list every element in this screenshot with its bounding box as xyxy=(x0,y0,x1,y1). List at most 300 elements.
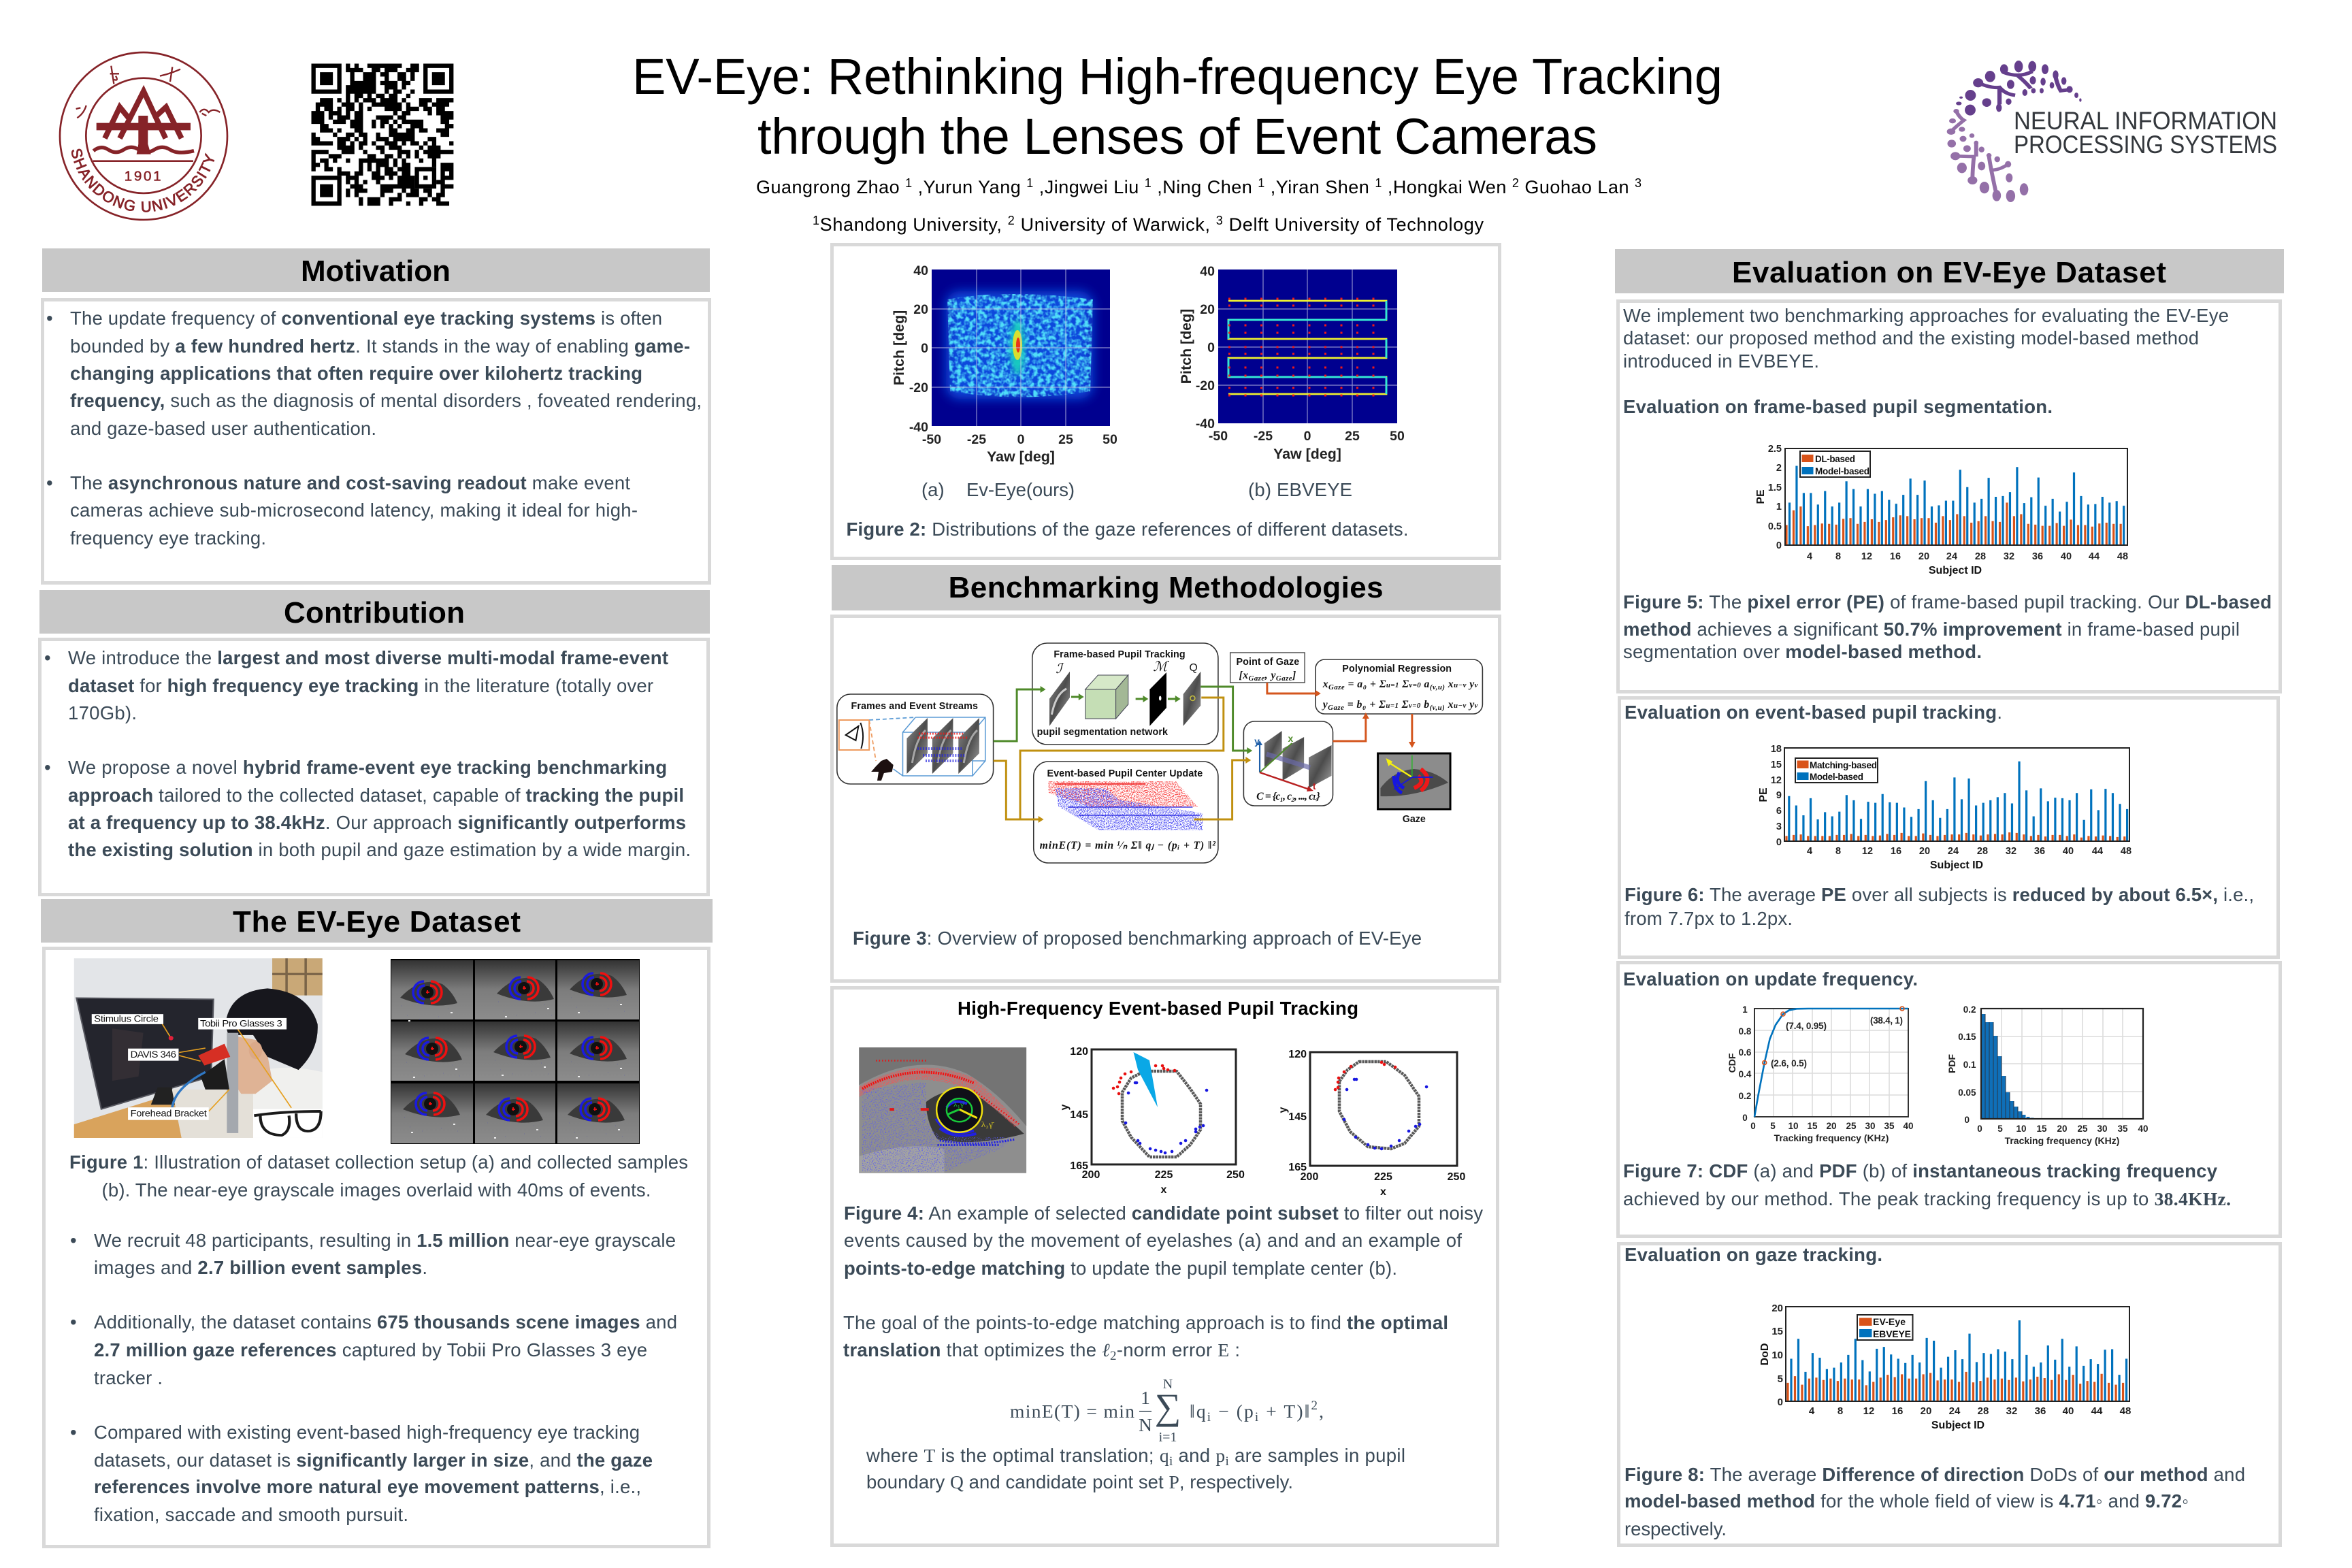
text: matching goal: 2 xyxy=(1110,1349,1116,1363)
bullet 2: frequency eye tracking. xyxy=(70,527,266,549)
chart: Figure 7 PDF: 20 xyxy=(2057,1124,2068,1134)
chart: points-to-edge matching after xyxy=(1277,1049,1465,1198)
chart: points-to-edge matching after: 120 xyxy=(1288,1049,1307,1060)
chart: Figure 6 pixel error: 28 xyxy=(1977,846,1988,857)
bullet 2: • xyxy=(44,757,51,778)
subheading: gaze tracking: Evaluation on gaze tracking. xyxy=(1624,1244,1882,1265)
authors: ,Yurun Yang xyxy=(913,177,1026,197)
bullet 2 xyxy=(46,472,638,549)
text: equation legend xyxy=(866,1445,1405,1492)
chart: Figure 7 PDF: 15 xyxy=(2036,1124,2047,1134)
title xyxy=(632,48,1722,165)
chart: Figure 5 pixel error: 24 xyxy=(1946,551,1957,562)
caption: Figure 5 xyxy=(1623,591,2272,662)
chart: EV-Eye gaze heatmap: 0 xyxy=(1017,432,1025,447)
chart: points-to-edge matching after: x xyxy=(1380,1186,1386,1198)
box: Point of Gaze: Point of Gaze xyxy=(1237,657,1299,668)
caption: Figure 8: model-based method for the whole field of view is 4.71◦ and 9.72◦ xyxy=(1624,1490,2189,1512)
caption: Figure 4: points-to-edge matching to update the pupil template center (b). xyxy=(844,1258,1397,1279)
subheading: event-based pupil tracking: Evaluation on event-based pupil tracking. xyxy=(1624,702,2002,723)
box: Polynomial Regression: x xyxy=(1323,679,1328,690)
chart: Figure 5 pixel error: 2.5 xyxy=(1768,444,1782,455)
affiliations: Shandong University, xyxy=(820,214,1007,235)
label: Tobii Pro Glasses 3: Tobii Pro Glasses 3 xyxy=(200,1018,282,1029)
label: DAVIS 346: DAVIS 346 xyxy=(131,1049,176,1060)
chart: Figure 7 CDF: 20 xyxy=(1826,1121,1837,1131)
bullet: comparison: fixation, saccade and smooth pursuit. xyxy=(94,1504,408,1525)
bullet 2: cameras achieve sub-microsecond latency, making it ideal for high- xyxy=(70,500,638,521)
bullet 1: The update frequency of conventional eye tracking systems is often xyxy=(70,308,662,329)
diagram: EV-Eye pipeline xyxy=(837,643,1482,863)
box: Polynomial Regression: u=1 Σv=0 b xyxy=(1386,699,1429,710)
authors: Guohao Lan xyxy=(1519,177,1634,197)
chart: Figure 7 PDF: 0 xyxy=(1964,1115,1970,1125)
box: Polynomial Regression: Gaze xyxy=(1328,704,1344,712)
chart: EV-Eye gaze heatmap xyxy=(891,263,1117,465)
panel: The EV-Eye Dataset xyxy=(44,949,709,1546)
equation: minE(T): N xyxy=(1139,1414,1152,1435)
box: Polynomial Regression: x xyxy=(1445,679,1454,690)
authors: 1 xyxy=(1026,176,1033,190)
authors: 1 xyxy=(1375,176,1382,190)
subcaption a: (a) xyxy=(921,479,945,500)
bullet 2: the existing solution in both pupil and gaze estimation by a wide margin. xyxy=(68,839,691,860)
arrows: orange flow xyxy=(1267,683,1416,748)
bullet: comparison xyxy=(70,1422,653,1525)
box: Event-based Pupil Center Update: Event-based Pupil Center Update xyxy=(1047,768,1203,779)
caption: Figure 6: from 7.7px to 1.2px. xyxy=(1624,908,1793,929)
title: EV-Eye: Rethinking High-frequency Eye Tracking xyxy=(632,48,1722,105)
equation: minE(T): i=1 xyxy=(1159,1430,1177,1445)
bullet 1: dataset for high frequency eye tracking in the literature (totally over xyxy=(68,675,653,696)
heading: Contribution: Contribution xyxy=(284,596,465,630)
chart: Figure 8 difference of direction: 24 xyxy=(1949,1405,1961,1417)
bullet: comparison: references involve more natural eye movement patterns, i.e., xyxy=(94,1476,641,1497)
affiliations: 3 xyxy=(1216,214,1223,227)
logo: Shandong University seal: 1901 xyxy=(125,169,163,184)
chart: Figure 8 difference of direction: 20 xyxy=(1771,1303,1783,1314)
authors: 2 xyxy=(1512,176,1519,190)
caption: Figure 8 xyxy=(1624,1464,2245,1539)
caption: Figure 3: Figure 3: Overview of proposed benchmarking approach of EV-Eye xyxy=(853,928,1422,949)
box: Frame-based Pupil Tracking: pupil segmentation network xyxy=(1037,727,1169,738)
bullet: scene images: Additionally, the dataset contains 675 thousands scene images and xyxy=(94,1311,677,1333)
chart: EBVEYE gaze pattern: 0 xyxy=(1304,429,1311,444)
box: Polynomial Regression: = a₀ + Σ xyxy=(1345,679,1386,690)
chart: Figure 6 pixel error: Model-based xyxy=(1810,772,1863,782)
chart: Figure 8 difference of direction: 32 xyxy=(2006,1405,2017,1417)
chart: Figure 8 difference of direction: DoD xyxy=(1759,1343,1771,1365)
chart: Figure 6 pixel error: PE xyxy=(1758,787,1769,802)
heading: Evaluation on EV-Eye Dataset: Evaluation on EV-Eye Dataset xyxy=(1732,256,2166,289)
equation: minE(T): ∑ xyxy=(1155,1386,1181,1427)
text: equation legend: are samples in pupil xyxy=(1229,1445,1405,1466)
bullet 1: frequency, such as the diagnosis of mental disorders , foveated rendering, xyxy=(70,390,702,411)
chart: EBVEYE gaze pattern: 25 xyxy=(1345,429,1360,444)
bullet: comparison: • xyxy=(70,1422,77,1443)
box: Polynomial Regression: (v,u) xyxy=(1430,704,1445,712)
box: candidate set C: t xyxy=(1313,781,1316,791)
chart: Figure 8 difference of direction: 4 xyxy=(1809,1405,1815,1417)
chart: Figure 6 pixel error: 44 xyxy=(2092,846,2103,857)
chart: points-to-edge matching before: 200 xyxy=(1082,1169,1100,1181)
chart: EV-Eye gaze heatmap: 25 xyxy=(1058,432,1073,447)
chart: points-to-edge matching before: x xyxy=(1161,1184,1167,1196)
authors: ,Ning Chen xyxy=(1152,177,1258,197)
image: eye with candidate points: λ₁γ̄ xyxy=(953,1101,965,1109)
bullet: scene images xyxy=(70,1311,677,1388)
chart: Figure 7 CDF: 5 xyxy=(1770,1121,1776,1131)
caption: Figure 5: method achieves a significant 50.7% improvement in frame-based pupil xyxy=(1623,619,2240,640)
caption: Figure 4 xyxy=(844,1203,1483,1279)
chart: points-to-edge matching before xyxy=(1059,1046,1245,1196)
chart: Figure 6 pixel error: 9 xyxy=(1776,790,1782,801)
chart: EV-Eye gaze heatmap: 0 xyxy=(921,341,928,356)
heading: Motivation xyxy=(42,248,710,292)
chart: Figure 7 PDF: 0.1 xyxy=(1963,1060,1976,1070)
box: candidate set C: C = {c₁, c₂, ..., cL} xyxy=(1256,791,1320,802)
box: Polynomial Regression: u−v yv xyxy=(1454,679,1477,690)
logo: Neural Information Processing Systems xyxy=(1947,61,2277,202)
chart: Figure 7 PDF xyxy=(1946,1004,2149,1146)
chart: Figure 7 CDF: (7.4, 0.95) xyxy=(1786,1021,1827,1031)
chart: Figure 8 difference of direction xyxy=(1759,1303,2131,1431)
chart: Figure 8 difference of direction: 36 xyxy=(2035,1405,2046,1417)
equation: minE(T): , xyxy=(1319,1401,1324,1422)
box: Frames and Event Streams xyxy=(837,694,994,784)
chart: Figure 6 pixel error: 40 xyxy=(2063,846,2074,857)
chart: EBVEYE gaze pattern: -40 xyxy=(1196,416,1215,431)
panel: Benchmarking Methodologies xyxy=(832,617,1500,981)
title: through the Lenses of Event Cameras xyxy=(757,108,1597,165)
chart: Figure 8 difference of direction: 44 xyxy=(2091,1405,2103,1417)
equation: minE(T): ‖q xyxy=(1190,1401,1206,1422)
subheading: frame-based pupil segmentation: Evaluation on frame-based pupil segmentation. xyxy=(1623,396,2053,417)
box: Polynomial Regression: Polynomial Regression xyxy=(1342,664,1452,674)
chart: Figure 7 CDF: 1 xyxy=(1742,1004,1748,1015)
chart: Figure 6 pixel error: 48 xyxy=(2121,846,2132,857)
bullet 2: at a frequency up to 38.4kHz. Our approach significantly outperforms xyxy=(68,812,686,833)
chart: Figure 5 pixel error: 28 xyxy=(1975,551,1986,562)
chart: Figure 6 pixel error: 6 xyxy=(1776,806,1782,817)
chart: Figure 7 CDF: 0.2 xyxy=(1739,1091,1751,1101)
chart: Figure 5 pixel error: 4 xyxy=(1807,551,1812,562)
box: Polynomial Regression: x xyxy=(1445,699,1454,710)
chart: Figure 7 PDF: PDF xyxy=(1946,1054,1957,1073)
box: Polynomial Regression: = b₀ + Σ xyxy=(1344,699,1386,710)
logo: Neural Information Processing Systems: PROCESSING SYSTEMS xyxy=(2014,131,2277,159)
chart: Figure 7 CDF: 30 xyxy=(1865,1121,1876,1131)
text: matching goal: -norm error xyxy=(1117,1339,1218,1360)
chart: Figure 6 pixel error: 20 xyxy=(1919,846,1930,857)
text: matching goal xyxy=(843,1312,1448,1363)
subheading: update frequency: Evaluation on update frequency. xyxy=(1623,968,1918,990)
image: gaze result xyxy=(1378,753,1450,809)
panel: gaze tracking evaluation xyxy=(1618,1244,2280,1545)
bullet: scene images: • xyxy=(70,1311,77,1333)
heading: Evaluation on EV-Eye Dataset xyxy=(1615,249,2284,293)
chart: Figure 7 CDF: CDF xyxy=(1727,1053,1737,1073)
text: equation legend: boundary Q and candidate point set P, respectively. xyxy=(866,1471,1293,1492)
chart: Figure 6 pixel error: 36 xyxy=(2034,846,2045,857)
text: equation legend: and xyxy=(1173,1445,1215,1466)
chart: Figure 7 PDF: 35 xyxy=(2117,1124,2128,1134)
bullet 2 xyxy=(44,757,691,860)
bullet 2: The asynchronous nature and cost-saving readout make event xyxy=(70,472,630,493)
chart: EBVEYE gaze pattern: 40 xyxy=(1200,264,1215,279)
chart: points-to-edge matching after: 225 xyxy=(1374,1171,1392,1183)
logo: Shandong University seal: SHANDONG UNIVERSITY xyxy=(71,148,215,212)
affiliations: 1 xyxy=(813,214,819,227)
caption: Figure 5: segmentation over model-based method. xyxy=(1623,641,1982,662)
chart: Figure 7 PDF: 40 xyxy=(2138,1124,2149,1134)
chart: Figure 7 PDF: 25 xyxy=(2077,1124,2088,1134)
bullet 1: changing applications that often require over kilohertz tracking xyxy=(70,363,642,384)
bullet 1: • xyxy=(46,308,53,329)
bullet: scene images: tracker . xyxy=(94,1367,163,1388)
box: Frame-based Pupil Tracking: Frame-based Pupil Tracking xyxy=(1054,649,1186,660)
box: Polynomial Regression: u=1 Σv=0 a xyxy=(1386,679,1429,690)
heading: The EV-Eye Dataset xyxy=(41,899,713,943)
QR code xyxy=(312,64,453,206)
box: Frame-based Pupil Tracking: ℐ xyxy=(1056,662,1064,676)
bullet 2: We propose a novel hybrid frame-event eye tracking benchmarking xyxy=(68,757,667,778)
bullet 1 xyxy=(44,647,668,723)
caption: Figure 4: events caused by the movement of eyelashes (a) and and an example of xyxy=(844,1230,1462,1251)
equation: minE(T): 2 xyxy=(1311,1399,1318,1413)
chart: Figure 5 pixel error: 16 xyxy=(1890,551,1901,562)
chart: EBVEYE gaze pattern: -25 xyxy=(1254,429,1273,444)
chart: Figure 7 CDF: 0 xyxy=(1742,1113,1748,1123)
box: Polynomial Regression xyxy=(1316,659,1482,714)
chart: Figure 7 CDF: 15 xyxy=(1807,1121,1818,1131)
bullet: scene images: 2.7 million gaze references captured by Tobii Pro Glasses 3 eye xyxy=(94,1339,647,1360)
chart: Figure 6 pixel error: 8 xyxy=(1835,846,1841,857)
chart: EBVEYE gaze pattern: 0 xyxy=(1207,340,1215,355)
text: introduction: introduced in EVBEYE. xyxy=(1623,350,1819,372)
chart: points-to-edge matching before: 225 xyxy=(1155,1169,1173,1181)
equation: minE(T): N xyxy=(1163,1377,1173,1392)
chart: EV-Eye gaze heatmap: -25 xyxy=(967,432,986,447)
chart: Figure 7 CDF: 0 xyxy=(1750,1121,1756,1131)
text: equation legend: where T is the optimal translation; q xyxy=(866,1445,1169,1466)
box: Polynomial Regression: y xyxy=(1323,699,1328,710)
equation: minE(T): i xyxy=(1207,1410,1211,1424)
chart: EV-Eye gaze heatmap: Yaw [deg] xyxy=(987,448,1055,465)
text: introduction: dataset: our proposed method and the existing model-based method xyxy=(1623,327,2199,348)
box: Frame-based Pupil Tracking xyxy=(1032,643,1218,745)
chart: Figure 6 pixel error: 12 xyxy=(1771,775,1782,786)
panel: frame-based evaluation xyxy=(1618,301,2280,691)
arrows: gold flow xyxy=(994,698,1251,823)
chart: Figure 5 pixel error: PE xyxy=(1755,489,1767,504)
caption: Figure 8: respectively. xyxy=(1624,1518,1727,1539)
chart: EV-Eye gaze heatmap: 40 xyxy=(913,263,928,278)
chart: Figure 8 difference of direction: 0 xyxy=(1778,1396,1783,1408)
panel: High-Frequency Event-based Pupil Tracking xyxy=(832,988,1497,1545)
bullet: participants: We recruit 48 participants, resulting in 1.5 million near-eye grayscale xyxy=(94,1230,676,1251)
label: Stimulus Circle: Stimulus Circle xyxy=(94,1013,159,1024)
chart: Figure 5 pixel error: 12 xyxy=(1861,551,1872,562)
chart: EV-Eye gaze heatmap: Pitch [deg] xyxy=(891,310,907,385)
text: equation legend: i xyxy=(1225,1454,1229,1469)
chart: points-to-edge matching before: 120 xyxy=(1070,1046,1088,1058)
chart: Figure 6 pixel error: Matching-based xyxy=(1810,760,1877,770)
chart: Figure 7 PDF: 0.2 xyxy=(1963,1004,1976,1015)
chart: Figure 5 pixel error: 40 xyxy=(2061,551,2072,562)
panel: Contribution xyxy=(39,640,708,894)
chart: Figure 5 pixel error: 36 xyxy=(2032,551,2043,562)
chart: Figure 7 PDF: 5 xyxy=(1997,1124,2003,1134)
heading: Benchmarking Methodologies xyxy=(832,565,1501,610)
bullet 1: and gaze-based user authentication. xyxy=(70,418,376,439)
chart: Figure 6 pixel error: Subject ID xyxy=(1930,860,1983,871)
chart: Figure 5 pixel error: 1.5 xyxy=(1768,483,1782,493)
image: eye with candidate points: λ₂γ̄ xyxy=(981,1120,994,1129)
bullet: comparison: Compared with existing event-based high-frequency eye tracking xyxy=(94,1422,640,1443)
chart: EBVEYE gaze pattern: 20 xyxy=(1200,302,1215,317)
logo: Neural Information Processing Systems: NEURAL INFORMATION xyxy=(2014,107,2277,135)
chart: Figure 5 pixel error: Subject ID xyxy=(1929,565,1982,576)
authors: 1 xyxy=(1145,176,1152,190)
chart: Figure 7 CDF: 0.6 xyxy=(1739,1047,1752,1058)
chart: Figure 8 difference of direction: 15 xyxy=(1771,1326,1783,1337)
authors: Guangrong Zhao xyxy=(756,177,900,197)
panel: event-based evaluation xyxy=(1620,698,2278,957)
chart: Figure 7 CDF: 0.8 xyxy=(1739,1026,1752,1036)
equation: minE(T): minE(T) = min xyxy=(1010,1401,1134,1422)
bullet 1: • xyxy=(44,647,51,668)
bullet 2: • xyxy=(46,472,53,493)
photo: collection setup xyxy=(74,958,323,1138)
text: matching goal: E : xyxy=(1218,1339,1240,1360)
equation: minE(T): i xyxy=(1255,1410,1258,1424)
box: Point of Gaze: ] xyxy=(1292,670,1296,681)
text: matching goal: The goal of the points-to-edge matching approach is to find the optimal xyxy=(843,1312,1448,1333)
chart: Figure 5 pixel error: 1 xyxy=(1776,502,1782,512)
heading: The EV-Eye Dataset: The EV-Eye Dataset xyxy=(233,905,521,938)
authors: ,Jingwei Liu xyxy=(1034,177,1144,197)
box: Frame-based Pupil Tracking: Q xyxy=(1190,662,1198,674)
box: Polynomial Regression: (v,u) xyxy=(1430,683,1445,691)
heading: High-Frequency Event-based Pupil Tracking: High-Frequency Event-based Pupil Tracking xyxy=(958,998,1358,1019)
chart: Figure 5 pixel error: 0.5 xyxy=(1768,521,1782,532)
chart: EBVEYE gaze pattern: -50 xyxy=(1209,429,1228,444)
chart: Figure 8 difference of direction: 20 xyxy=(1921,1405,1931,1417)
bullet: participants: images and 2.7 billion event samples. xyxy=(94,1257,427,1278)
chart: Figure 6 pixel error: 24 xyxy=(1948,846,1959,857)
chart: Figure 8 difference of direction: EV-Eye xyxy=(1873,1316,1906,1327)
chart: Figure 8 difference of direction: 16 xyxy=(1892,1405,1903,1417)
box: candidate set C: y xyxy=(1254,736,1260,747)
chart: Figure 7 CDF: 10 xyxy=(1788,1121,1799,1131)
box: Frame-based Pupil Tracking: ℳ xyxy=(1153,659,1169,674)
panel: Figure 2 distributions xyxy=(832,245,1500,558)
caption: Figure 7 xyxy=(1623,1160,2231,1209)
chart: Figure 7 PDF: 0.15 xyxy=(1958,1032,1976,1042)
text: equation legend: i xyxy=(1169,1454,1173,1469)
chart: EV-Eye gaze heatmap: -20 xyxy=(909,380,928,395)
chart: points-to-edge matching before: y xyxy=(1059,1104,1071,1110)
caption: Figure 7: Figure 7: CDF (a) and PDF (b) of instantaneous tracking frequency xyxy=(1623,1160,2218,1181)
label: Forehead Bracket: Forehead Bracket xyxy=(131,1108,207,1118)
chart: Figure 5 pixel error: 48 xyxy=(2117,551,2128,562)
image: eye with candidate points xyxy=(858,1047,1026,1173)
text: matching goal: translation that optimizes the ℓ xyxy=(843,1339,1110,1360)
caption: Figure 1 xyxy=(69,1152,688,1200)
chart: Figure 5 pixel error: 44 xyxy=(2089,551,2100,562)
chart: Figure 7 PDF: 10 xyxy=(2016,1124,2027,1134)
chart: Figure 6 pixel error: 0 xyxy=(1776,837,1782,848)
chart: Figure 6 pixel error: 15 xyxy=(1771,760,1782,770)
chart: Figure 7 CDF: 25 xyxy=(1846,1121,1857,1131)
caption: Figure 6 xyxy=(1624,884,2254,929)
chart: Figure 8 difference of direction: 10 xyxy=(1771,1350,1783,1361)
caption: Figure 7: achieved by our method. The peak tracking frequency is up to 38.4KHz. xyxy=(1623,1188,2231,1209)
chart: EBVEYE gaze pattern: -20 xyxy=(1196,378,1215,393)
caption: Figure 5: Figure 5: The pixel error (PE) of frame-based pupil tracking. Our DL-based xyxy=(1623,591,2272,612)
caption: Figure 4: Figure 4: An example of selected candidate point subset to filter out noisy xyxy=(844,1203,1483,1224)
chart: Figure 8 difference of direction: 28 xyxy=(1978,1405,1989,1417)
chart: points-to-edge matching after: y xyxy=(1277,1107,1289,1113)
authors: ,Yiran Shen xyxy=(1265,177,1375,197)
affiliations: University of Warwick, xyxy=(1015,214,1215,235)
chart: points-to-edge matching after: 165 xyxy=(1288,1162,1307,1173)
chart: Figure 8 difference of direction: 8 xyxy=(1838,1405,1843,1417)
chart: points-to-edge matching before: 165 xyxy=(1070,1160,1088,1172)
equation: minE(T): + T)‖ xyxy=(1260,1401,1309,1422)
chart: Figure 6 pixel error: 32 xyxy=(2006,846,2016,857)
bullet 1: bounded by a few hundred hertz. It stands in the way of enabling game- xyxy=(70,336,690,357)
chart: Figure 5 pixel error: 0 xyxy=(1776,540,1782,551)
bullet 1: 170Gb). xyxy=(68,702,137,723)
caption: Figure 8: Figure 8: The average Difference of direction DoDs of our method and xyxy=(1624,1464,2245,1485)
chart: EV-Eye gaze heatmap: -40 xyxy=(909,420,928,435)
chart: Figure 7 CDF: 0.4 xyxy=(1739,1069,1752,1079)
heading: Benchmarking Methodologies: Benchmarking Methodologies xyxy=(949,571,1384,604)
affiliations: 2 xyxy=(1008,214,1015,227)
panel: update frequency evaluation xyxy=(1618,962,2280,1236)
chart: Figure 8 difference of direction: 12 xyxy=(1863,1405,1874,1417)
box: Event-based Pupil Center Update: minE(T) = min ¹⁄ₙ Σ‖ qⱼ − (pᵢ + T) ‖² xyxy=(1040,840,1216,851)
box: Polynomial Regression: Gaze xyxy=(1328,683,1345,691)
image grid: eye samples with events xyxy=(391,959,640,1144)
arrows: green flow xyxy=(994,686,1252,754)
chart: Figure 5 pixel error: 2 xyxy=(1776,463,1782,474)
caption: Figure 1: (b). The near-eye grayscale images overlaid with 40ms of events. xyxy=(102,1179,651,1200)
box: Point of Gaze: Gaze xyxy=(1276,674,1292,683)
text: introduction xyxy=(1623,305,2229,372)
box: Point of Gaze xyxy=(1230,653,1305,683)
chart: points-to-edge matching before: 250 xyxy=(1226,1169,1245,1181)
panel: Motivation xyxy=(42,299,709,583)
chart: Figure 8 difference of direction: EBVEYE xyxy=(1873,1328,1911,1339)
box: candidate set C: x xyxy=(1288,733,1293,744)
affiliations: Delft University of Technology xyxy=(1223,214,1484,235)
chart: Figure 5 pixel error xyxy=(1755,444,2128,576)
chart: EV-Eye gaze heatmap: 20 xyxy=(913,302,928,317)
chart: Figure 5 pixel error: 32 xyxy=(2004,551,2014,562)
chart: Figure 7 CDF: (38.4, 1) xyxy=(1870,1015,1903,1026)
heading: Motivation: Motivation xyxy=(301,255,451,288)
subcaption b: (b) EBVEYE xyxy=(1248,479,1352,500)
box: Frames and Event Streams: Frames and Event Streams xyxy=(851,701,978,712)
box: Event-based Pupil Center Update xyxy=(1034,762,1218,863)
chart: Figure 8 difference of direction: 5 xyxy=(1778,1373,1783,1385)
chart: points-to-edge matching before: 145 xyxy=(1070,1109,1088,1121)
chart: Figure 6 pixel error: 18 xyxy=(1771,744,1782,755)
chart: Figure 6 pixel error: 12 xyxy=(1862,846,1873,857)
